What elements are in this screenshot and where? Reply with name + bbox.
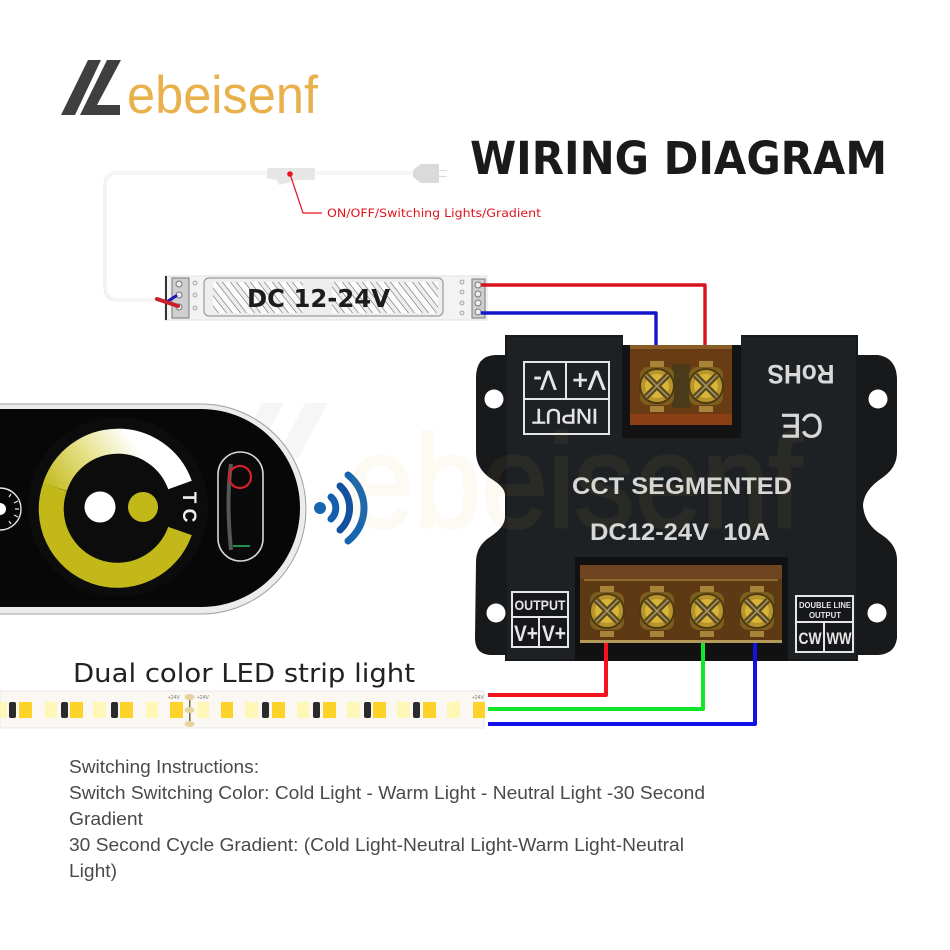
white dot button <box>84 492 116 522</box>
logo <box>61 60 318 125</box>
input wires on power supply <box>157 296 178 306</box>
instruction heading: Switching Instructions: <box>69 757 259 777</box>
instruction line 3: 30 Second Cycle Gradient: (Cold Light-Neutral Light-Warm Light-Neutral <box>69 835 684 855</box>
mounting holes <box>484 390 888 622</box>
cut point pads: +24V <box>472 695 484 701</box>
switch callout <box>287 171 542 220</box>
switching instructions <box>69 757 705 881</box>
output label box: OUTPUT <box>514 597 566 613</box>
voltage label: DC 12-24V <box>247 284 391 313</box>
resistors <box>9 702 420 718</box>
cut point pads: +24V <box>197 695 209 701</box>
ring halo <box>28 417 208 597</box>
red output wire <box>488 643 606 695</box>
double line output label box: OUTPUT <box>809 611 841 620</box>
power supply <box>157 276 487 320</box>
double line output label box: WW <box>826 629 852 648</box>
output label box: V+ <box>514 621 538 646</box>
rating label: DC12-24V 10A <box>590 519 770 546</box>
output label box: V+ <box>542 621 566 646</box>
input label box: V- <box>534 365 556 395</box>
instruction line 4: Light) <box>69 861 117 881</box>
hatching <box>213 282 438 313</box>
remote control <box>0 404 306 614</box>
color temperature ring <box>51 441 180 575</box>
logo mark <box>61 60 121 115</box>
blue negative wire <box>481 313 656 345</box>
output terminal <box>575 557 788 661</box>
plug <box>413 164 447 183</box>
T C label: T C <box>178 492 199 523</box>
inline switch <box>267 168 315 185</box>
input terminal <box>622 345 741 438</box>
input label box: INPUT <box>532 404 598 427</box>
controller <box>475 335 897 661</box>
green output wire <box>488 643 703 709</box>
double line output label box: DOUBLE LINE <box>799 601 852 610</box>
CE mark: CE <box>781 406 823 444</box>
title: WIRING DIAGRAM <box>470 132 887 185</box>
brightness dial <box>0 488 21 530</box>
LED strip heading: Dual color LED strip light <box>73 659 415 689</box>
RoHS mark: RoHS <box>768 359 834 389</box>
warm dot button <box>128 492 158 522</box>
warm-cool LED pairs <box>0 702 460 718</box>
LED strip <box>0 691 485 728</box>
switch cable <box>105 164 447 300</box>
input wires <box>481 285 705 345</box>
left terminal block <box>172 278 189 318</box>
label panel <box>204 278 443 316</box>
output label box <box>512 592 568 647</box>
power button capsule <box>218 452 263 561</box>
cut point pads: +24V <box>168 695 180 701</box>
cut point pads <box>168 694 484 727</box>
instruction line 1: Switch Switching Color: Cold Light - Warm Light - Neutral Light -30 Second <box>69 783 705 803</box>
output wires <box>488 643 755 724</box>
wireless signal icon <box>314 475 364 541</box>
logo wordmark: ebeisenf <box>127 66 318 125</box>
right terminal block <box>472 279 485 318</box>
blue output wire <box>488 643 755 724</box>
remote shell <box>0 404 306 614</box>
watermark slashes <box>232 403 328 462</box>
mounting dots <box>193 280 464 315</box>
input label box: V+ <box>572 365 606 395</box>
model label: CCT SEGMENTED <box>572 473 792 500</box>
red positive wire <box>481 285 705 345</box>
controller body with ears <box>475 335 897 661</box>
input label box <box>524 362 609 434</box>
callout text: ON/OFF/Switching Lights/Gradient <box>327 206 542 220</box>
double line output label box <box>796 596 853 652</box>
watermark wordmark: ebeisenf <box>347 408 802 555</box>
instruction line 2: Gradient <box>69 809 143 829</box>
double line output label box: CW <box>798 629 822 648</box>
